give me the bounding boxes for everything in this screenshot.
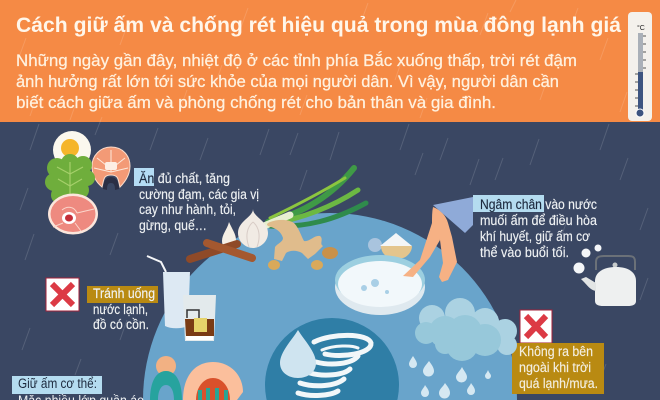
callout: keep body warm [12, 376, 144, 400]
callout: foot soaking text: Ngâm chân vào nước [480, 197, 597, 212]
large blue circle [143, 213, 517, 400]
icon: legs soaking [403, 207, 457, 282]
icon: beanie hat [150, 356, 182, 400]
callout: foot soaking text [473, 195, 597, 260]
title: Cách giữ ấm và chống rét hiệu quả trong mùa đông lạnh giá [16, 14, 621, 37]
food text block: Ăn đủ chất, tăng [139, 171, 230, 186]
icon: egg [53, 131, 91, 169]
callout: avoid cold drinks: nước lạnh, [93, 302, 148, 317]
icon: skirt [433, 197, 473, 233]
callout: foot soaking text: khí huyết, giữ ấm cơ [480, 229, 590, 244]
icon: lettuce [45, 154, 95, 204]
icon: red cross box, outdoors [520, 310, 552, 343]
highlight: Tránh uống [87, 286, 158, 303]
icon: cinnamon sticks [190, 243, 252, 259]
callout: avoid cold drinks: đồ có cồn. [93, 317, 149, 332]
food text block: cay như hành, tỏi, [139, 202, 236, 217]
icon: ham [48, 194, 98, 234]
food text block [134, 168, 259, 233]
icon: kettle [581, 256, 636, 306]
callout: do not go outside: quá lạnh/mưa. [519, 376, 598, 391]
highlight: Ngâm chân [473, 195, 544, 212]
intro text block: ảnh hưởng rất lớn tới sức khỏe của mọi người dân. Vì vậy, người dân cần [16, 72, 559, 91]
icon: salmon steak [92, 147, 130, 190]
icon: rain cloud [415, 298, 517, 361]
icon: whiskey glass [183, 295, 216, 341]
icon: salt bowl [368, 233, 412, 258]
icon: glass of water [147, 256, 190, 328]
highlight: Ăn [134, 168, 154, 186]
callout: keep body warm: Giữ ấm cơ thể: [18, 376, 97, 391]
icon: water drop [280, 330, 316, 378]
icon: green onion [264, 168, 366, 226]
icon: garlic clove [222, 222, 236, 249]
callout: do not go outside: ngoài khi trời [519, 360, 591, 375]
icon: steam bubbles [574, 244, 602, 274]
food text block: cường đạm, các gia vị [139, 187, 259, 202]
callout: do not go outside [512, 343, 604, 394]
callout: avoid cold drinks: Tránh uống [93, 286, 155, 301]
icon: thermometer [628, 12, 652, 121]
icon: garlic bulb [238, 209, 268, 248]
callout: do not go outside: Không ra bên [519, 344, 593, 359]
panel: dark background [0, 122, 660, 400]
icon: rain drops [409, 356, 491, 398]
intro text block: biết cách giữa ấm và phòng chống rét cho bản thân và gia đình. [16, 93, 496, 112]
icon: thermometer: °C [637, 24, 645, 32]
intro text block: Những ngày gần đây, nhiệt độ ở các tỉnh phía Bắc xuống thấp, trời rét đậm [16, 51, 577, 70]
tornado dark circle [265, 318, 399, 400]
callout: foot soaking text: thể vào buổi tối. [480, 245, 569, 260]
callout: avoid cold drinks [87, 286, 158, 332]
food text block: gừng, quế… [139, 218, 207, 233]
icon: red cross box, drinks [46, 278, 79, 311]
panel: orange header [0, 0, 660, 122]
icon: ginger [267, 220, 338, 270]
icon: foot basin [335, 255, 425, 315]
icon: scarf and hat [183, 362, 243, 400]
callout: foot soaking text: muối ấm để điều hòa [480, 213, 597, 228]
intro text block [16, 51, 577, 112]
icon: tornado [298, 335, 371, 395]
